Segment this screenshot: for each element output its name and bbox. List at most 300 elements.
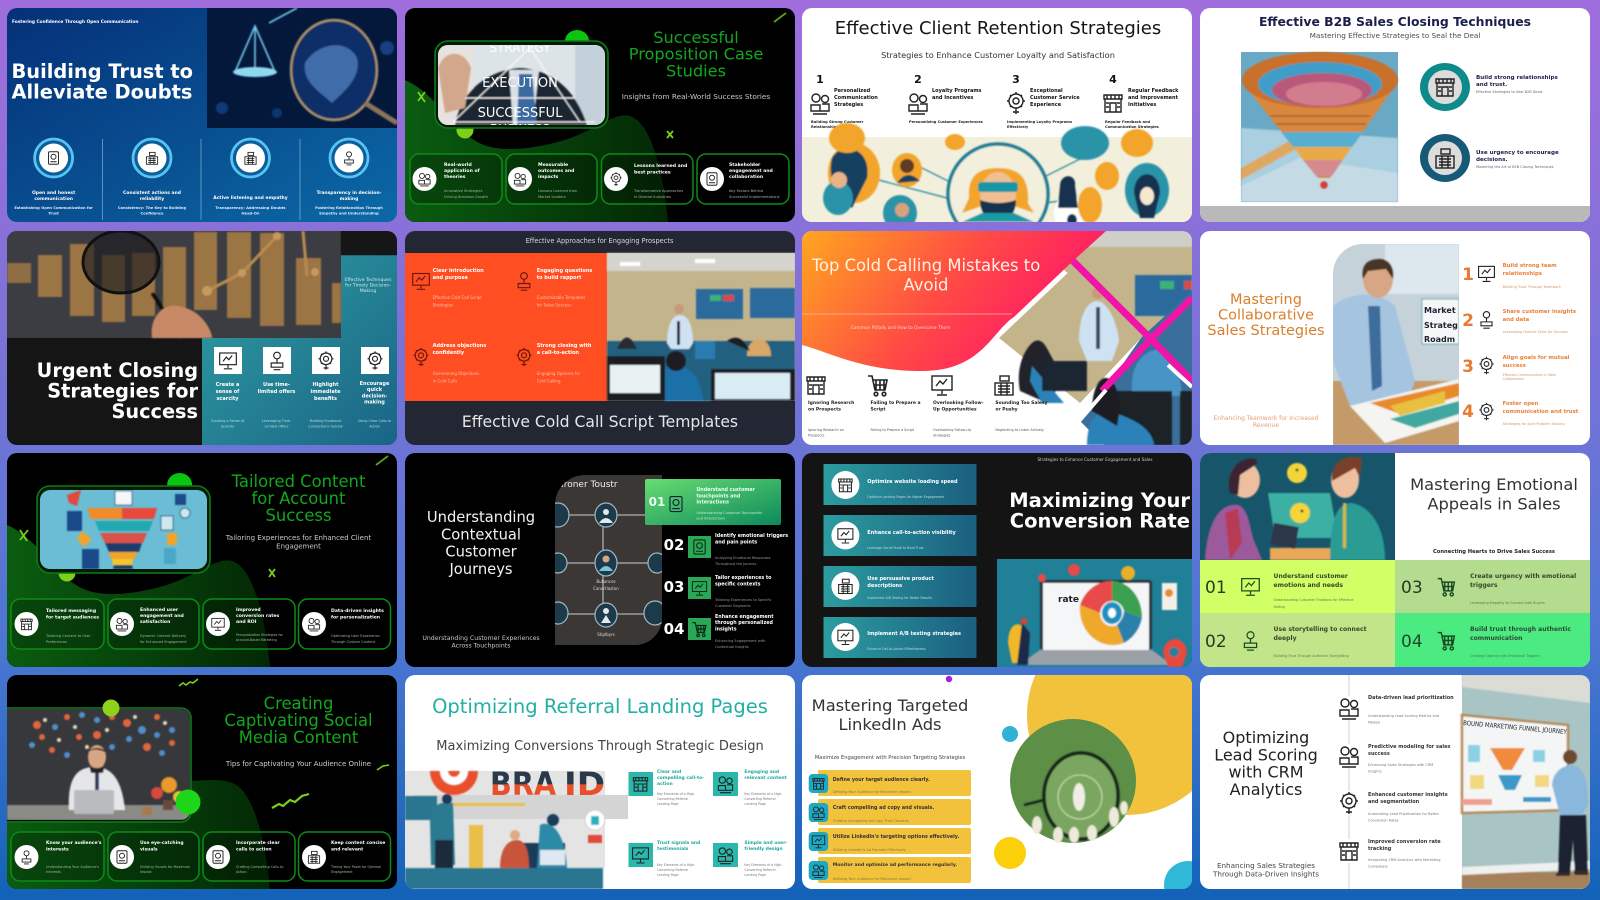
mistake: research: on Prospects: [808, 406, 841, 412]
element: simple design: [713, 840, 787, 877]
card: stakeholder engagement: collaboration: [729, 174, 763, 180]
step 4: communication and trust: [1503, 409, 1579, 415]
title: Effective Cold Call Script Templates: [462, 413, 738, 431]
script item: clear introduction: [413, 268, 484, 308]
subtitle: Tips for Captivating Your Audience Online: [225, 760, 371, 768]
tip: product descriptions: [824, 566, 976, 607]
card: real-world application: application of: [444, 168, 481, 174]
item: consistent actions: Consistency: The Key to Building: [118, 206, 186, 210]
element: simple design: Simple and user-: [744, 841, 787, 846]
strategy 3: 3: [1012, 73, 1020, 86]
item: open and honest communication: Trust: [48, 212, 59, 216]
card: know your audience: Interests: [46, 870, 61, 874]
card: tailored messaging: Preferences: [46, 640, 67, 644]
card: clear calls to action: Crafting Compelling Calls to: [236, 865, 283, 869]
card: conversion: conversion rates: [236, 613, 280, 619]
card: eye-catching visuals: Impact: [140, 870, 152, 874]
box 02: Use storytelling to connect: [1274, 626, 1367, 633]
subtitle: Engagement: [276, 543, 321, 551]
item: predictive modeling: Insights: [1368, 770, 1382, 774]
item: open and honest communication: Establishing Open Communication for: [14, 206, 93, 210]
step 03: specific contexts: [715, 582, 761, 588]
box 01: 01: [1205, 578, 1227, 598]
subtitle: Fostering Confidence Through Open Communication: [12, 19, 138, 25]
mistake: research: Ignoring Research on: [808, 428, 844, 432]
script item: clear introduction: Strategies: [433, 302, 453, 308]
card: know your audience: Understanding Your Audience's: [46, 865, 99, 869]
strategy 4: 4: [1109, 73, 1117, 86]
mistake: no script: Failing to Prepare a Script: [870, 428, 915, 432]
script item: engaging questions: Customizable Templates: [537, 295, 585, 300]
step 03: [664, 575, 772, 608]
item: use urgency: Use urgency to encourage: [1476, 150, 1559, 156]
panel: Effective Client Retention Strategies: [802, 8, 1192, 244]
tactic: quick decisions: Action: [369, 424, 380, 428]
item: active listening: Active listening and empathy: [213, 195, 288, 201]
strategy 1: [811, 73, 878, 129]
element: simple design: Converting Referral: [744, 868, 776, 872]
element: simple design: Landing Page: [744, 873, 766, 877]
step 2: Share customer insights: [1503, 309, 1576, 315]
card: real-world application: [410, 154, 502, 204]
item: use urgency: [1420, 134, 1559, 182]
photo: man at roadmap: Roadm: [1424, 335, 1455, 344]
script item: engaging questions: [518, 268, 592, 308]
tip: testing: Implement A/B testing strategies: [867, 631, 961, 637]
item: build relationships: [1420, 63, 1558, 111]
element: engaging content: Key Elements of a High-: [744, 792, 783, 796]
step 04: [664, 614, 774, 649]
tactic: time-limited: [258, 347, 295, 428]
step 04: insights: [715, 626, 737, 632]
card: measurable outcomes: [506, 154, 597, 204]
item: lead prioritization: Data-driven lead prioritization: [1368, 695, 1454, 701]
card: conversion: Personalization Strategies for: [236, 633, 283, 637]
mistake: follow-up: [932, 376, 984, 437]
box 03: Create urgency with emotional: [1470, 573, 1576, 580]
item: conversion tracking: Campaigns: [1368, 864, 1388, 868]
photo: man at roadmap: Strateg: [1424, 321, 1458, 330]
title: Optimizing Referral Landing Pages: [432, 695, 768, 718]
card: measurable outcomes: impacts: [538, 174, 559, 180]
photo: journey map: [547, 475, 666, 645]
tip: product descriptions: Use persuasive product: [867, 576, 934, 582]
element: clear call-to-action: compelling call-to-: [657, 775, 704, 781]
tip: product descriptions: Implement A/B Testing for Better Results: [867, 596, 932, 600]
subtitle: Connecting Hearts to Drive Sales Success: [1433, 549, 1555, 555]
strategy 3: Exceptional: [1030, 88, 1063, 94]
strategy 2: Loyalty Programs: [932, 88, 982, 94]
yellow blob: [1027, 615, 1227, 815]
squiggles: [179, 679, 389, 808]
tip: call to action: Enhance call-to-action visibility: [867, 530, 957, 536]
card: clear calls to action: [203, 832, 295, 881]
photo frame: man with social icons: [5, 708, 191, 822]
step 4: [1462, 401, 1579, 426]
panel: Maximizing Your Conversion Rate: [802, 453, 1192, 667]
photo: marketing funnel whiteboard: [1462, 675, 1590, 889]
tactic: quick decisions: quick: [367, 387, 383, 393]
bar: target audience: Define your target audience clearly.: [833, 777, 930, 783]
photo frame: SUCCESSFUL: [478, 106, 563, 121]
box 03: triggers: [1470, 582, 1498, 589]
item: transparency: Fostering Relationships Through: [315, 206, 383, 210]
step 04: Contextual Insights: [715, 645, 749, 649]
item: consistent actions: [118, 139, 187, 216]
subtitle: Insights from Real-World Success Stories: [622, 92, 770, 101]
illustration: brand building team: BRA: [490, 765, 556, 803]
step 01: Understand customer: [696, 488, 755, 493]
strategy 4: Regular Feedback: [1128, 88, 1178, 94]
mistake: no script: [868, 376, 920, 432]
step 03: Customer Segments: [715, 604, 751, 608]
photo: journey map: Canortlaston: [593, 586, 619, 591]
title: Understanding: [427, 509, 535, 526]
photo: funnel on document: [1241, 52, 1398, 202]
item: build relationships: Effective Strategies to Seal B2B Deals: [1476, 90, 1543, 94]
panel: Mastering Collaborative Sales Strategies: [1200, 231, 1590, 445]
step 02: [664, 533, 788, 566]
card: stakeholder engagement: [697, 154, 789, 204]
item: predictive modeling: [1337, 744, 1450, 774]
mistake: research: Prospects: [808, 433, 825, 437]
title: Alleviate Doubts: [12, 80, 192, 104]
orange panel: [405, 253, 607, 401]
subtitle: Effective Techniques: [344, 278, 392, 283]
tactic: quick decisions: Encourage: [360, 381, 389, 387]
step 03: Tailor experiences to: [715, 576, 771, 581]
step 1: 1: [1462, 265, 1474, 285]
panel: Mastering Targeted LinkedIn Ads: [802, 615, 1227, 900]
tactic: time-limited: Use time-: [263, 382, 290, 388]
element: trust signals: Converting Referral: [657, 868, 688, 872]
script item: objections: [414, 343, 486, 384]
tactic: time-limited: limited offers: [258, 389, 295, 395]
element: trust signals: Trust signals and: [657, 841, 700, 846]
bar: ad copy: [809, 799, 971, 825]
box 02: 02: [1205, 632, 1227, 652]
mistake: follow-up: Overlooking Follow-: [933, 401, 983, 406]
photo: scales and magnifying globe: [207, 8, 397, 128]
step 01: interactions: [696, 500, 729, 506]
card: tailored messaging: Tailoring Content to User: [46, 634, 91, 638]
strategy 3: Effectively: [1007, 125, 1029, 129]
illustration: brand building team: ID: [564, 765, 605, 803]
element: simple design: friendly design: [744, 846, 783, 852]
illustration: brand building team: [405, 765, 628, 889]
subtitle: Common Pitfalls and How to Overcome Them: [851, 325, 950, 331]
subtitle: for Timely Decision-: [345, 282, 391, 288]
step 3: Align goals for mutual: [1503, 355, 1570, 361]
item: predictive modeling: Enhancing Sales Strategies with CRM: [1368, 763, 1433, 767]
blue corner circle: [1164, 861, 1212, 900]
strategy 4: and Improvement: [1128, 95, 1179, 101]
tactic: scarcity: Scarcity: [221, 424, 234, 428]
item: open and honest communication: communication: [34, 196, 73, 202]
title: Customer: [445, 544, 518, 561]
title: Effective B2B Sales Closing Techniques: [1259, 14, 1531, 29]
step 03: Tailoring Experiences to Specific: [715, 598, 771, 602]
tip: loading speed: [824, 464, 976, 505]
photo: magnifier on pawn: [1010, 719, 1136, 843]
tactic: immediate benefits: [308, 347, 343, 428]
title: LinkedIn Ads: [838, 715, 942, 734]
tip: testing: Enhance Call-to-Action Effectiveness: [867, 647, 926, 651]
step 03: 03: [664, 578, 684, 596]
strategy 3: Experience: [1030, 102, 1062, 108]
script item: engaging questions: Engaging questions: [537, 268, 592, 274]
card: engagement: satisfaction: [140, 619, 170, 625]
step 01: Understanding Customer Touchpoints: [696, 511, 762, 515]
item: use urgency: Mastering the Art of B2B Closing Techniques: [1476, 165, 1554, 169]
mistake: salesy: Neglecting to Listen Actively: [995, 428, 1044, 432]
illustration: two people and emoji: [1200, 453, 1395, 560]
tactic: immediate benefits: Highlight: [312, 382, 338, 388]
item: conversion tracking: Improved conversion rate: [1368, 839, 1441, 845]
item: transparency: [315, 139, 383, 216]
element: trust signals: Landing Page: [657, 873, 678, 877]
subtitle: Maximizing Conversions Through Strategic Design: [436, 739, 764, 754]
card: tailored messaging: for target audiences: [46, 614, 99, 620]
step 04: Enhancing Engagement with: [715, 639, 765, 643]
mistake: no script: Script: [870, 406, 886, 412]
panel: Urgent Closing Strategies for Success: [7, 231, 397, 445]
item: customer insights: Automating Lead Prioritization for Better: [1368, 812, 1439, 816]
photo frame: EXECUTION: [482, 76, 558, 91]
item: consistent actions: reliability: [140, 196, 164, 202]
green circle: [176, 790, 200, 814]
bar: ad copy: Craft compelling ad copy and visuals.: [833, 805, 934, 811]
tactic: quick decisions: making: [364, 400, 385, 406]
subtitle: Maximize Engagement with Precision Targeting Strategies: [815, 755, 966, 761]
card: eye-catching visuals: [108, 832, 199, 881]
item: active listening: [213, 139, 288, 216]
strategy 1: Personalized: [834, 88, 870, 94]
script item: strong closing: Cold Calling: [537, 378, 561, 384]
box 02: Building Trust Through Authentic Storytelling: [1274, 654, 1349, 658]
strategy 1: Communication: [834, 95, 878, 101]
item: conversion tracking: Integrating CRM Analytics with Marketing: [1368, 858, 1440, 862]
strategy 4: Initiatives: [1128, 102, 1156, 108]
step 3: 3: [1462, 357, 1474, 377]
card: eye-catching visuals: Utilizing Visuals for Maximum: [140, 865, 190, 869]
card: tailored messaging: [11, 599, 104, 649]
tactic: quick decisions: [358, 347, 391, 428]
element: clear call-to-action: [628, 769, 704, 806]
tip: loading speed: Optimize Landing Pages for Higher Engagement: [867, 495, 945, 499]
title: Creating: [264, 694, 333, 713]
strategy 4: Regular Feedback and: [1105, 120, 1150, 124]
card: stakeholder engagement: Stakeholder: [729, 163, 760, 168]
script item: strong closing: a call-to-action: [537, 350, 579, 356]
x marks and squiggle: [20, 456, 388, 577]
title: Mastering Emotional: [1410, 475, 1578, 494]
title: Strategies for: [47, 380, 198, 402]
blue dot: [1002, 726, 1018, 742]
card: clear calls to action: Incorporate clear: [236, 841, 280, 846]
tactic: immediate benefits: benefits: [314, 396, 337, 402]
card: stakeholder engagement: engagement and: [729, 168, 773, 174]
subtitle: Tailoring Experiences for Enhanced Client: [226, 534, 371, 542]
element: engaging content: [713, 769, 788, 806]
tactic: scarcity: Creating a Sense of: [211, 419, 244, 423]
item: consistent actions: Confidence: [140, 212, 164, 216]
title: Contextual: [441, 526, 521, 543]
script item: strong closing: [516, 343, 592, 384]
photo frame: [435, 41, 608, 136]
photo: call centre: [607, 253, 795, 401]
title: Successful: [653, 28, 739, 47]
pink X accent: [1073, 261, 1192, 391]
step 4: 4: [1462, 402, 1474, 422]
tactic: scarcity: [211, 347, 245, 428]
card: stakeholder engagement: Successful Implementations: [729, 195, 780, 199]
step 2: and data: [1503, 317, 1530, 323]
title: Maximizing Your: [1009, 489, 1190, 512]
title: Captivating Social: [224, 711, 373, 730]
title: Conversion Rate: [1010, 509, 1190, 532]
script item: objections: Overcoming Objections: [433, 371, 479, 376]
step 01: 01: [649, 495, 665, 509]
step 3: Effective Communication in Sales: [1503, 373, 1556, 377]
bar: targeting options: Utilize LinkedIn's targeting options effectively.: [833, 834, 959, 840]
card: data-driven: Through Custom Content: [330, 640, 376, 644]
strategy 2: and Incentives: [932, 95, 973, 101]
card: engagement: engagement and: [140, 613, 184, 619]
x marks and squiggle: [418, 13, 786, 138]
tactic: time-limited: Leveraging Time-: [262, 419, 291, 423]
card: real-world application: theories: [444, 174, 466, 180]
panel: Top Cold Calling Mistakes to Avoid: [802, 231, 1192, 445]
step 2: 2: [1462, 311, 1474, 331]
item: conversion tracking: [1337, 839, 1441, 868]
tip: call to action: [824, 515, 976, 556]
strategy 2: 2: [914, 73, 922, 86]
bar: monitor performance: Defining Your Audience for Maximum Impact: [833, 877, 911, 881]
box 04: 04: [1401, 632, 1423, 652]
tactic: immediate benefits: Building Emotional: [310, 419, 341, 423]
script item: engaging questions: for Sales Success: [537, 302, 571, 308]
item: open and honest communication: [14, 139, 93, 216]
mistake: no script: Failing to Prepare a: [870, 401, 920, 406]
gradient blob: [802, 231, 1106, 371]
strategy 2: Personalizing Customer Experiences: [909, 120, 983, 124]
step 04: Enhance engagement: [715, 615, 774, 620]
title: Urgent Closing: [37, 359, 198, 382]
title: Success: [266, 506, 331, 525]
mistake: salesy: Sounding Too Salesy: [995, 401, 1048, 406]
title: Collaborative: [1218, 308, 1314, 324]
item: build relationships: and trust.: [1476, 82, 1507, 88]
photo: wood bars and magnifier: [7, 231, 397, 338]
box 04: [1395, 613, 1590, 667]
card: conversion: [203, 599, 295, 649]
step 04: 04: [664, 620, 684, 638]
strategy 4: [1104, 73, 1179, 129]
tactic: immediate benefits: Connections Quickly: [308, 424, 343, 428]
tactic: immediate benefits: immediate: [311, 389, 341, 395]
tip: loading speed: Optimize website loading speed: [867, 479, 958, 485]
mistake: follow-up: Up Opportunities: [933, 406, 977, 412]
card: clear calls to action: calls to action: [236, 846, 272, 852]
card: know your audience: interests: [46, 846, 69, 852]
panel: Mastering Emotional Appeals in Sales: [1200, 453, 1590, 667]
panel: Creating Captivating Social Media Content: [5, 675, 397, 889]
photo frame: funnel illustration: [37, 486, 210, 573]
script item: clear introduction: Effective Cold Call Script: [433, 295, 482, 300]
box 01: Selling: [1274, 605, 1285, 609]
card: lessons learned: [602, 154, 693, 204]
title: for Account: [252, 489, 346, 508]
item: open and honest communication: Open and honest: [32, 191, 75, 196]
mistake: follow-up: Strategies: [933, 433, 951, 437]
photo frame: BUSINESS: [490, 122, 550, 136]
card: lessons learned: best practices: [634, 170, 671, 176]
element: engaging content: Landing Page: [744, 802, 766, 806]
title: Top Cold Calling Mistakes to: [812, 256, 1040, 275]
mistake: research: Ignoring Research: [808, 401, 854, 406]
mistake: follow-up: Overlooking Follow-Up: [933, 428, 971, 432]
box 01: [1200, 560, 1395, 613]
box 04: communication: [1470, 635, 1523, 642]
box 04: Build trust through authentic: [1470, 626, 1571, 633]
card: conversion: and ROI: [236, 619, 257, 625]
strategy 1: 1: [816, 73, 824, 86]
photo: journey map: Stiplbyrs: [597, 632, 615, 637]
script item: strong closing: Strong closing with: [537, 343, 591, 349]
item: predictive modeling: success: [1368, 751, 1390, 757]
card: tailored messaging: Tailored messaging: [46, 609, 96, 614]
header: Effective Approaches for Engaging Prospects: [526, 237, 674, 245]
strategy 3: [1007, 73, 1080, 129]
script item: objections: confidently: [433, 350, 465, 356]
photo: journey map: Bukances: [596, 579, 616, 584]
step 01: [645, 479, 781, 525]
box 01: Understand customer: [1274, 573, 1348, 580]
lime circle: [456, 128, 474, 138]
tip: product descriptions: descriptions: [867, 583, 902, 589]
card: clear calls to action: Action: [236, 870, 247, 874]
step 3: success: [1503, 363, 1526, 369]
element: trust signals: [628, 840, 700, 877]
card: know your audience: [11, 832, 104, 881]
lime circle: [102, 700, 120, 716]
subtitle: Strategies to Enhance Customer Loyalty and Satisfaction: [881, 50, 1115, 60]
subtitle: Across Touchpoints: [452, 642, 510, 649]
step 3: [1462, 355, 1570, 381]
item: lead prioritization: Understanding Lead Scoring Metrics and: [1368, 714, 1439, 718]
step 4: Strategies for Joint Problem Solving: [1503, 422, 1565, 426]
item: predictive modeling: Predictive modeling for sales: [1368, 744, 1450, 750]
card: engagement: for Enhanced Engagement: [140, 640, 187, 644]
step 02: 02: [664, 536, 684, 554]
illustration: laptop donut chart: rate: [1058, 595, 1079, 605]
card: conversion: Account-Based Marketing: [236, 638, 277, 642]
item: consistent actions: Consistent actions and: [123, 191, 181, 196]
green circle: [167, 473, 192, 497]
tip: call to action: Leverage Social Proof to Build Trust: [867, 546, 924, 550]
strategy 1: Strategies: [834, 102, 863, 108]
card: measurable outcomes: Lessons Learned from: [538, 189, 577, 193]
panel: Optimizing Lead Scoring with CRM Analytics: [1200, 675, 1590, 889]
script item: clear introduction: Clear introduction: [433, 268, 484, 274]
photo: lower agents: [1080, 291, 1192, 445]
tactic: quick decisions: decision-: [362, 393, 387, 399]
element: clear call-to-action: Converting Referral: [657, 797, 688, 801]
card: concise content: and relevant: [331, 846, 364, 852]
box 01: Understanding Customer Emotions for Effective: [1274, 598, 1353, 602]
panel: Building Trust to Alleviate Doubts: [7, 8, 397, 222]
